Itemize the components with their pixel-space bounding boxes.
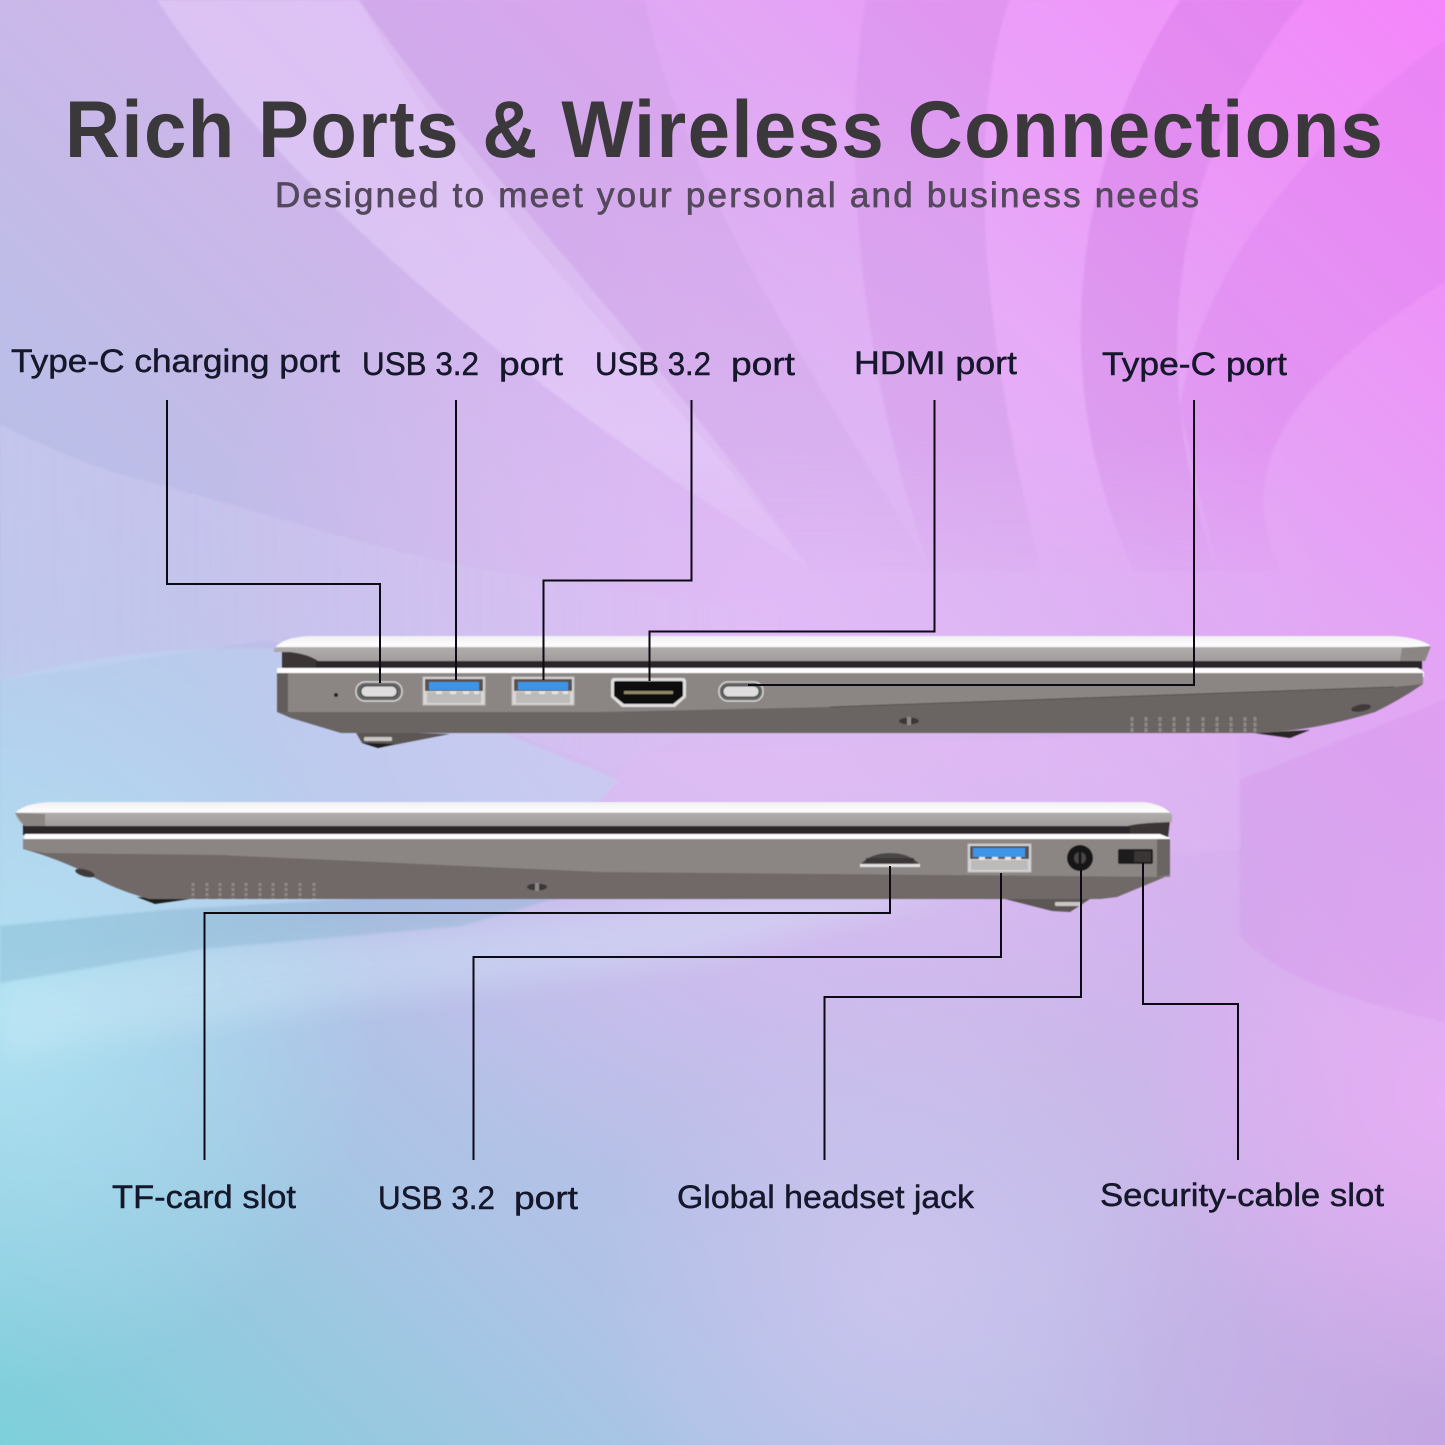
port labels: [11, 343, 1384, 1216]
line: usb port 1: [455, 400, 457, 680]
line: usb port 2: [544, 400, 692, 680]
lid: [274, 636, 1431, 661]
screw holes: [74, 867, 547, 891]
screw holes: [899, 703, 1371, 725]
base lower dark body: [277, 673, 1423, 733]
security-cable slot: [1118, 849, 1153, 864]
label: hdmi port: HDMI port: [854, 345, 1017, 381]
type-c port: [719, 682, 763, 701]
label: type-c port: Type-C port: [1102, 346, 1287, 382]
label: usb 3.2 port: port: [514, 1180, 578, 1216]
indicator dot: [334, 693, 338, 697]
line: type-c port: [748, 400, 1194, 685]
label: usb 3.2 port: port: [731, 346, 795, 382]
line: usb port 3: [474, 873, 1001, 1160]
hinge gap: [23, 825, 1148, 835]
label: global headset jack: Global headset jack: [677, 1179, 975, 1215]
base top white edge: [23, 834, 1170, 843]
label: usb 3.2 port: USB 3.2: [362, 346, 479, 382]
type-c charging port: [356, 682, 402, 701]
base lower dark body: [23, 839, 1170, 899]
laptop: left side view: [274, 636, 1431, 748]
tf-card slot: [860, 853, 920, 867]
speaker vents: [1132, 717, 1255, 733]
lid: [15, 802, 1172, 826]
line: type-c charging port: [167, 400, 380, 683]
leader lines: [167, 400, 1238, 1160]
label: usb 3.2 port: port: [499, 346, 563, 382]
subtitle: Designed to meet your personal and business needs: [275, 176, 1199, 215]
usb 3.2 port 3: [968, 844, 1031, 872]
label: type-c charging port: Type-C charging port: [11, 343, 340, 379]
label: tf-card slot: TF-card slot: [112, 1179, 296, 1215]
hdmi port: [611, 678, 686, 707]
line: security-cable slot: [1143, 863, 1238, 1160]
hinge gap: [282, 652, 322, 670]
line: tf-card slot: [204, 866, 890, 1160]
rubber foot: [355, 731, 450, 748]
base upper lighter band: [23, 839, 1170, 877]
headset jack: [1067, 845, 1093, 871]
label: usb 3.2 port: USB 3.2: [595, 346, 711, 382]
line: headset jack: [824, 870, 1081, 1160]
title: Rich Ports & Wireless Connections: [65, 84, 1383, 175]
label: usb 3.2 port: USB 3.2: [378, 1180, 495, 1216]
label: security-cable slot: Security-cable slot: [1100, 1177, 1384, 1213]
usb 3.2 port 2: [512, 677, 574, 705]
base top white edge: [277, 668, 1424, 677]
usb 3.2 port 1: [423, 677, 485, 705]
rubber foot: [1005, 899, 1090, 912]
line: hdmi port: [650, 400, 934, 681]
speaker vents: [193, 883, 314, 899]
base upper lighter band: [277, 673, 1423, 712]
laptop: right side view: [15, 802, 1172, 912]
